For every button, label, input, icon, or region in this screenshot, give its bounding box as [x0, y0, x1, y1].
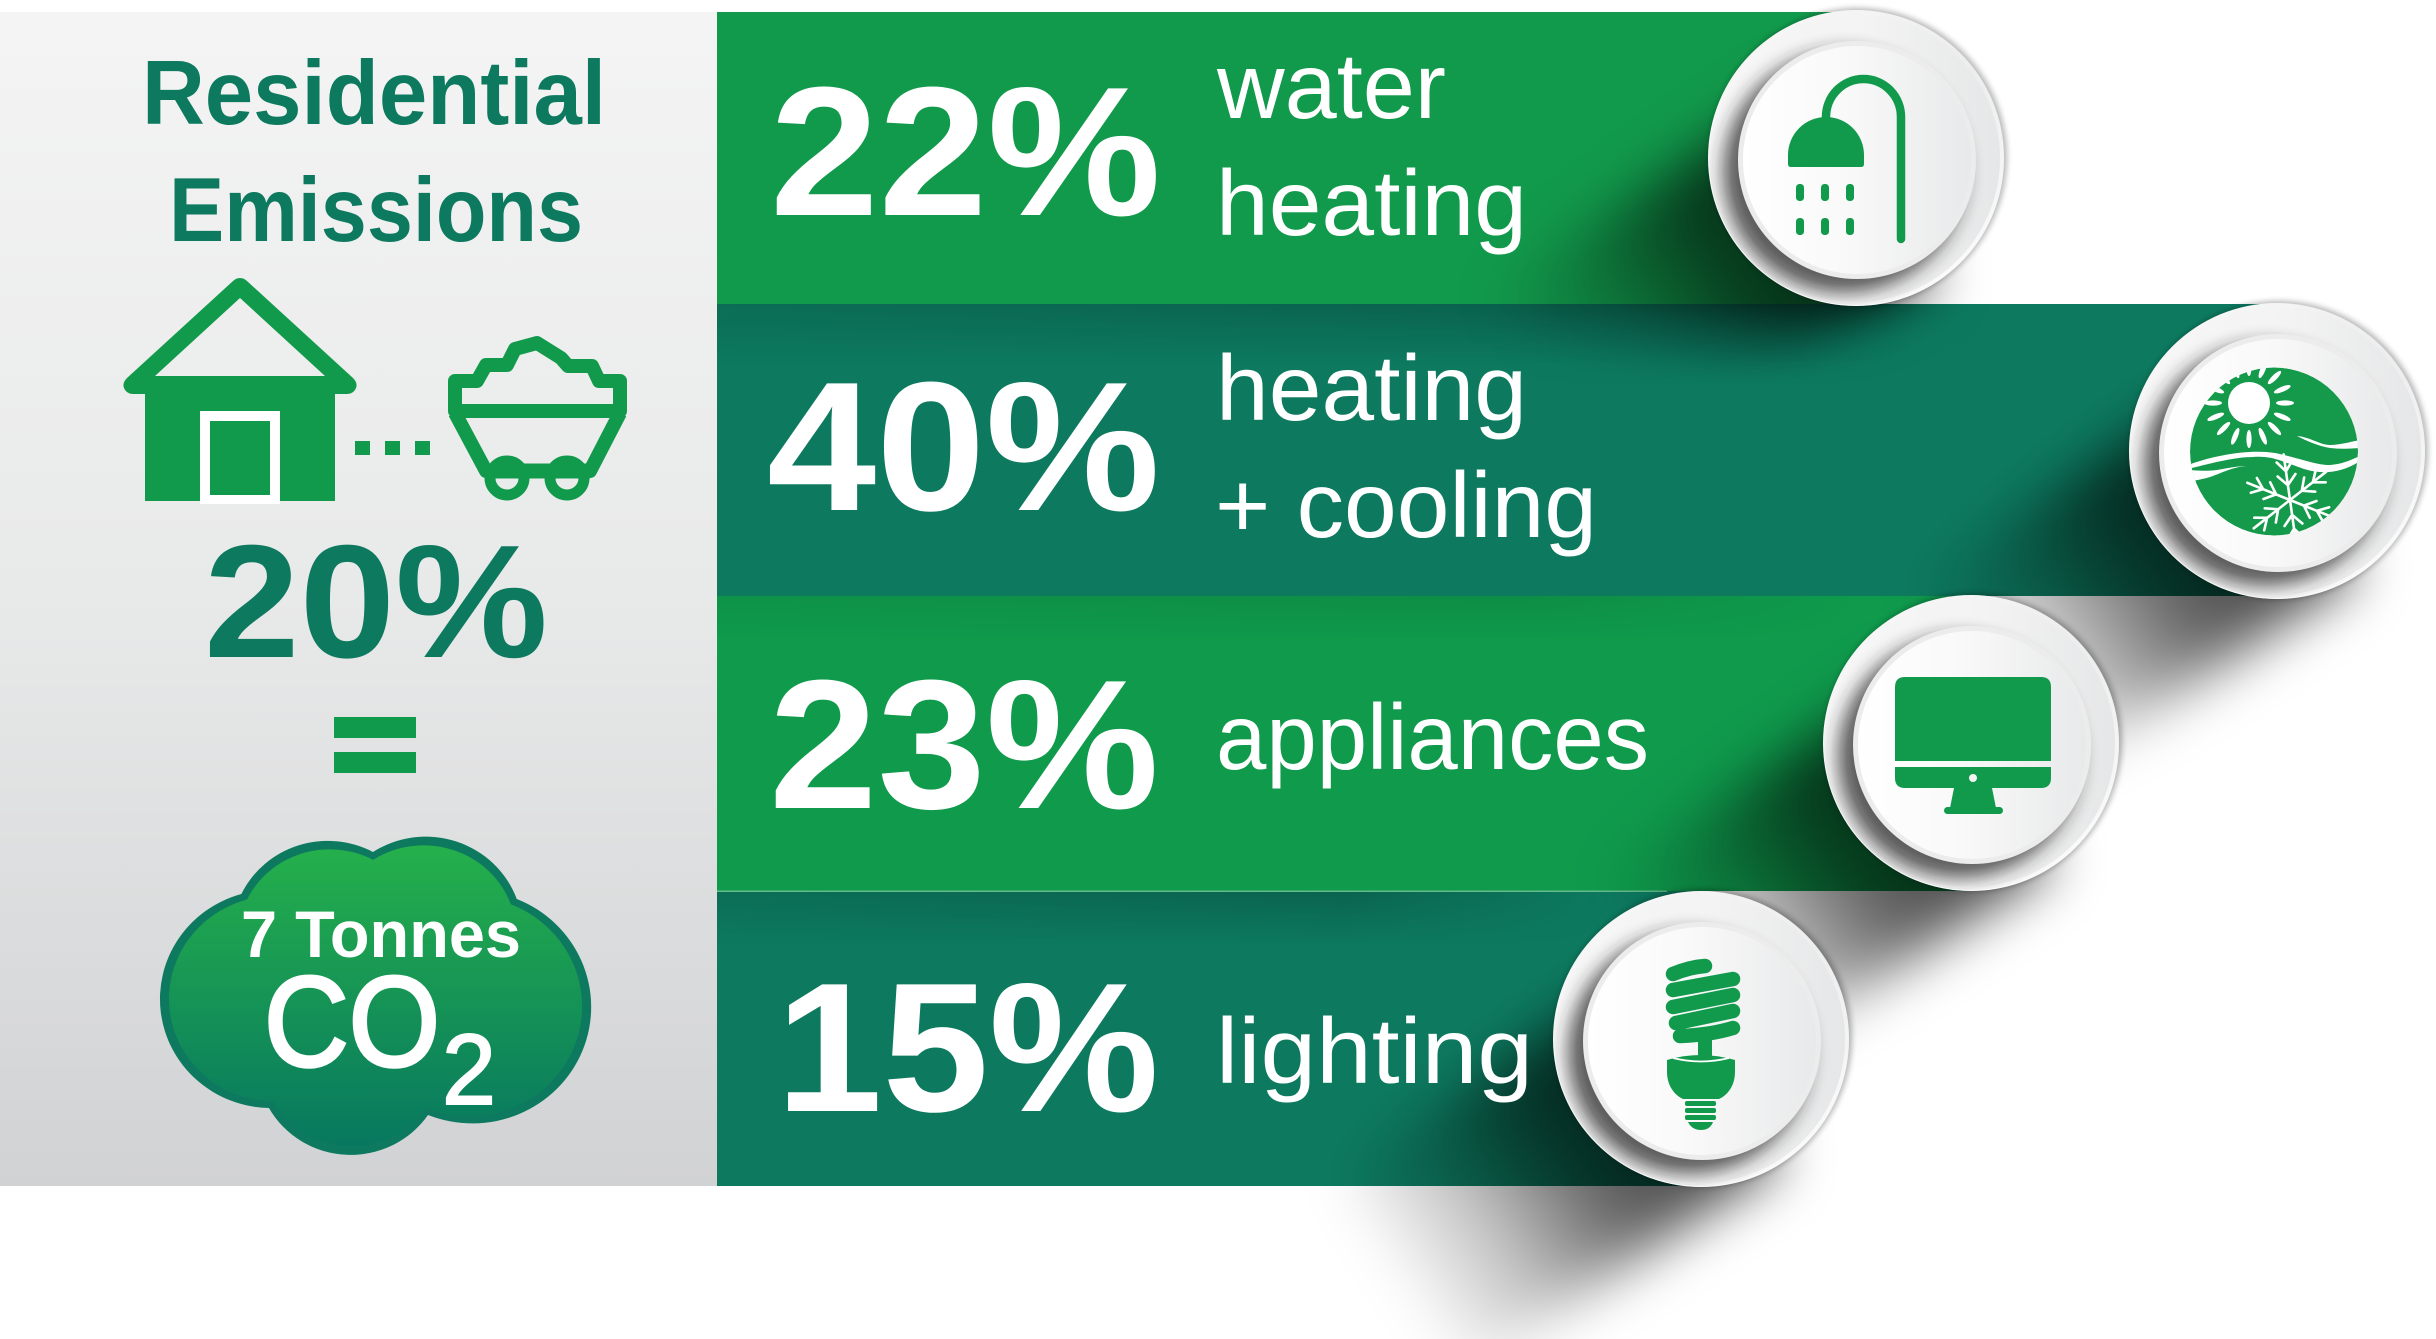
- icon: computer monitor: [1895, 677, 2051, 814]
- band: lighting background: [717, 891, 1701, 1186]
- panel: residential emissions summary: [0, 12, 717, 1186]
- waves: [2188, 436, 2364, 481]
- shadow: appliances disc: [1609, 668, 2052, 1073]
- disc: appliances: [1823, 593, 2122, 891]
- row: 15% lighting: [776, 944, 1533, 1150]
- icon: spiral light bulb: [1667, 966, 1735, 1130]
- snowflake: [2246, 453, 2330, 534]
- disc: water heating: [1708, 8, 2007, 306]
- icon: connector dots: [355, 441, 430, 455]
- label: lighting: lighting: [1216, 999, 1533, 1103]
- label: water heating: [1216, 34, 1527, 255]
- row: 23% appliances: [769, 641, 1649, 847]
- label: water heating: heating: [1216, 151, 1527, 255]
- disc: heating and cooling: [2129, 301, 2428, 599]
- sun: [2204, 368, 2294, 448]
- band: heating and cooling background: [717, 304, 2277, 596]
- cloud: 7 Tonnes CO2: [160, 837, 591, 1155]
- icon: house: [123, 278, 357, 504]
- row: 22% water heating: [770, 34, 1527, 255]
- heading: Residential Emissions: Emissions: [169, 160, 583, 261]
- percent: 15%: 15%: [776, 944, 1159, 1150]
- band: water heating background: [717, 12, 1857, 304]
- heading: Residential Emissions: Residential: [142, 43, 606, 144]
- icon: sun and snowflake: [2190, 368, 2358, 536]
- icon: shower: [1788, 79, 1901, 239]
- percent: 40%: 40%: [767, 343, 1160, 549]
- percent: 22%: 22%: [770, 48, 1161, 254]
- disc: lighting: [1553, 889, 1852, 1187]
- percent: 23%: 23%: [769, 641, 1159, 847]
- cloud: 7 Tonnes CO2: 2: [442, 1014, 496, 1126]
- label: heating + cooling: heating: [1216, 336, 1527, 440]
- label: heating + cooling: [1215, 336, 1597, 557]
- label: water heating: water: [1216, 34, 1446, 138]
- icon: coal cart: [455, 343, 620, 495]
- cloud: 7 Tonnes CO2: CO: [264, 951, 440, 1094]
- stat: 20%: 20%: [204, 512, 548, 692]
- heading: Residential Emissions: [142, 43, 606, 261]
- label: appliances: appliances: [1216, 685, 1649, 789]
- equals sign: [334, 717, 416, 773]
- shadow: lighting disc: [1339, 964, 1782, 1339]
- shadow: heating and cooling disc: [1915, 376, 2358, 781]
- band: appliances background: [717, 596, 1971, 891]
- label: heating + cooling: + cooling: [1215, 453, 1597, 557]
- shading: band top edges: [717, 304, 1704, 927]
- row: 40% heating + cooling: [767, 336, 1597, 557]
- shadow: water heating disc: [1517, 94, 1968, 372]
- cloud: 7 Tonnes CO2: 7 Tonnes: [241, 897, 521, 971]
